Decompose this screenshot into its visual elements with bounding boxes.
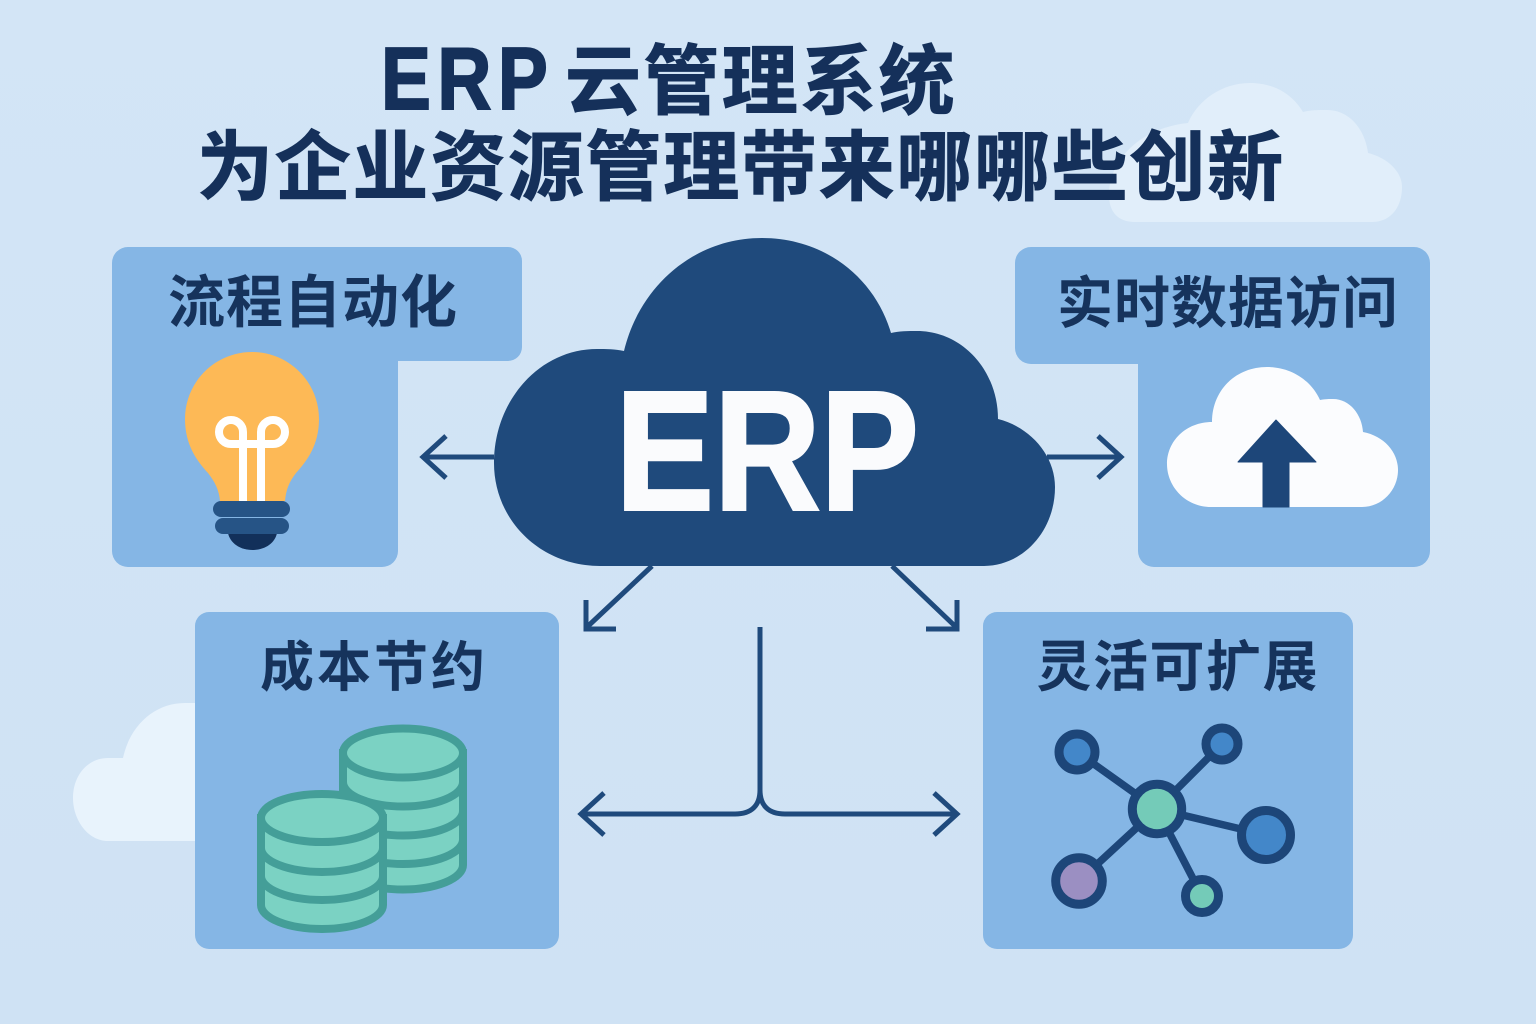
title: [197, 30, 1285, 211]
heading: real-time data access: 实时数据访问: [1057, 272, 1399, 335]
title: ERP: [381, 30, 554, 128]
panel: flexible scaling: [983, 612, 1353, 949]
panel: real-time data access: [1015, 247, 1430, 567]
heading: flexible scaling: 灵活可扩展: [1036, 636, 1319, 698]
panel: process automation: [112, 247, 522, 567]
arrow: to flexible scaling: [892, 566, 957, 629]
ERP label: ERP: [616, 356, 919, 546]
title: 为企业资源管理带来哪哪些创新: [197, 126, 1285, 211]
heading: cost saving: 成本节约: [260, 638, 488, 698]
icon: coin stacks: [261, 728, 463, 929]
arrow: to process automation: [423, 436, 494, 478]
arrow: to real-time data access: [1047, 436, 1121, 478]
panel: cost saving: [195, 612, 559, 949]
background cloud: lower left: [73, 703, 200, 841]
background cloud: top right: [1109, 83, 1402, 222]
arrow: to cost saving: [586, 566, 652, 629]
heading: process automation: 流程自动化: [168, 271, 458, 335]
icon: cloud upload: [1167, 367, 1398, 507]
central ERP cloud: [494, 238, 1055, 566]
icon: network: [1056, 728, 1290, 912]
icon: light bulb: [185, 352, 319, 550]
arrow: branching connector: [581, 627, 957, 835]
title: 云管理系统: [565, 40, 957, 125]
